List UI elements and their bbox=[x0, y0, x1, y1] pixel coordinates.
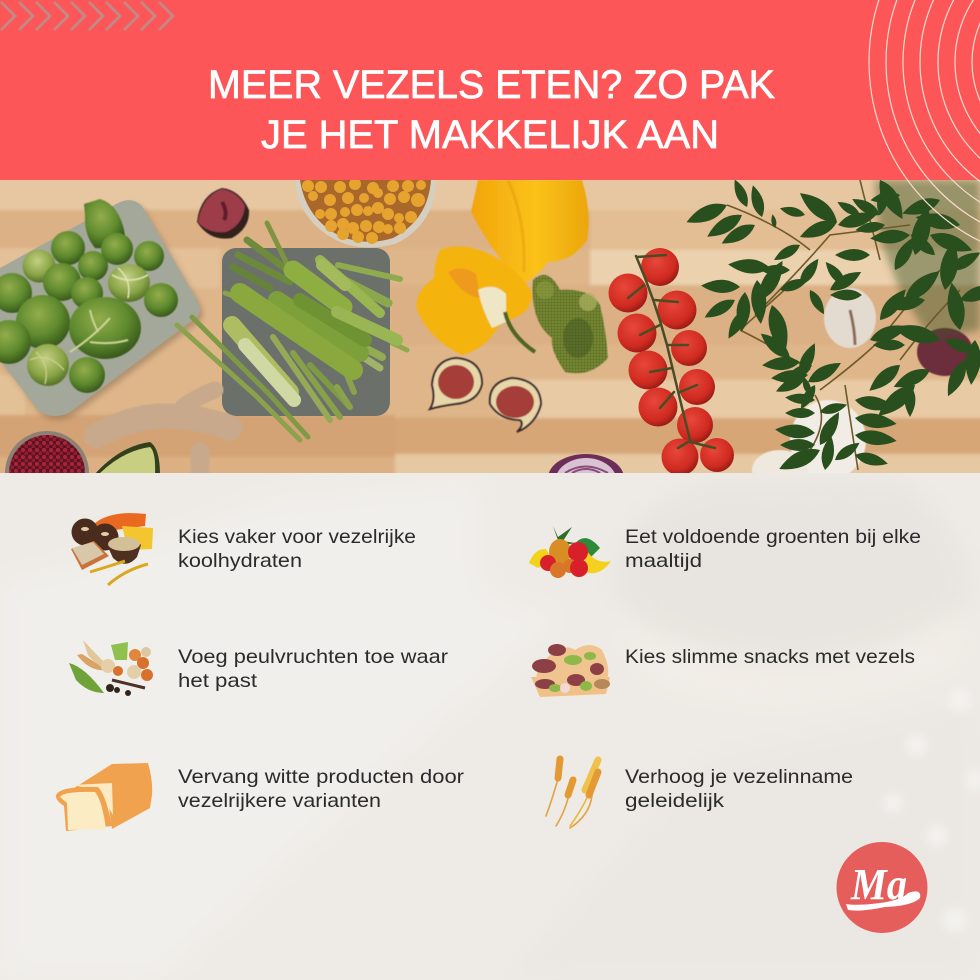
text: geleidelijk: Verhoog je vezelinname bbox=[625, 766, 853, 788]
figs: cut halves bbox=[430, 358, 541, 432]
logo: Ma: Ma bbox=[850, 860, 907, 909]
ginger root bbox=[96, 390, 230, 476]
plant with green leaves bbox=[684, 176, 980, 476]
icon: snack mix bbox=[531, 644, 610, 697]
text: witte producten: Vervang witte producten door bbox=[178, 766, 465, 788]
concentric circles decoration bbox=[869, 0, 980, 262]
icon: loaf of bread bbox=[56, 763, 152, 831]
title: JE HET MAKKELIJK AAN bbox=[261, 113, 719, 157]
text: groenten: maaltijd bbox=[625, 550, 702, 572]
cherry tomatoes on the vine bbox=[608, 248, 734, 476]
text: geleidelijk: geleidelijk bbox=[625, 790, 724, 812]
yellow pepper bbox=[417, 180, 589, 355]
faded background photo bbox=[0, 478, 980, 980]
text: groenten: Eet voldoende groenten bij elke bbox=[625, 526, 921, 548]
title bbox=[208, 63, 775, 157]
wooden tabletop bbox=[0, 175, 980, 478]
text: geleidelijk bbox=[625, 766, 853, 812]
header band bbox=[0, 0, 980, 180]
text: vezelrijke koolhydraten: Kies vaker voor vezelrijke bbox=[178, 526, 416, 548]
text: peulvruchten: Voeg peulvruchten toe waar bbox=[178, 646, 449, 668]
text: witte producten bbox=[178, 766, 465, 812]
text: snacks: Kies slimme snacks met vezels bbox=[625, 646, 915, 668]
red onion bbox=[548, 454, 624, 473]
grey plate with brussels sprouts bbox=[0, 199, 203, 420]
icon: legumes bbox=[69, 640, 153, 696]
garlic bulbs bbox=[752, 400, 866, 473]
text: witte producten: vezelrijkere varianten bbox=[178, 790, 381, 812]
photo: vegetables on wooden table bbox=[0, 180, 980, 473]
text: groenten bbox=[625, 526, 921, 572]
chevron decoration bbox=[1, 2, 173, 30]
title: MEER VEZELS ETEN? ZO PAK bbox=[208, 63, 775, 107]
glass vase and pot bbox=[824, 288, 973, 376]
icon: bread, donuts, rice and grain bbox=[71, 513, 153, 585]
avocado bbox=[94, 442, 160, 475]
text: vezelrijke koolhydraten bbox=[178, 526, 416, 572]
glass bowl with chickpeas bbox=[295, 178, 436, 248]
grey plate with celery and asparagus bbox=[177, 223, 407, 440]
logo: Ma bbox=[836, 842, 928, 933]
text: peulvruchten bbox=[178, 646, 449, 692]
icon: wheat stalks bbox=[546, 759, 598, 828]
text: peulvruchten: het past bbox=[178, 670, 258, 692]
fig: top bbox=[197, 188, 249, 239]
icon: fruit and vegetables bbox=[529, 526, 611, 578]
text: vezelrijke koolhydraten: koolhydraten bbox=[178, 550, 302, 572]
berry bowl bbox=[5, 431, 89, 473]
broccoli bbox=[533, 275, 608, 373]
